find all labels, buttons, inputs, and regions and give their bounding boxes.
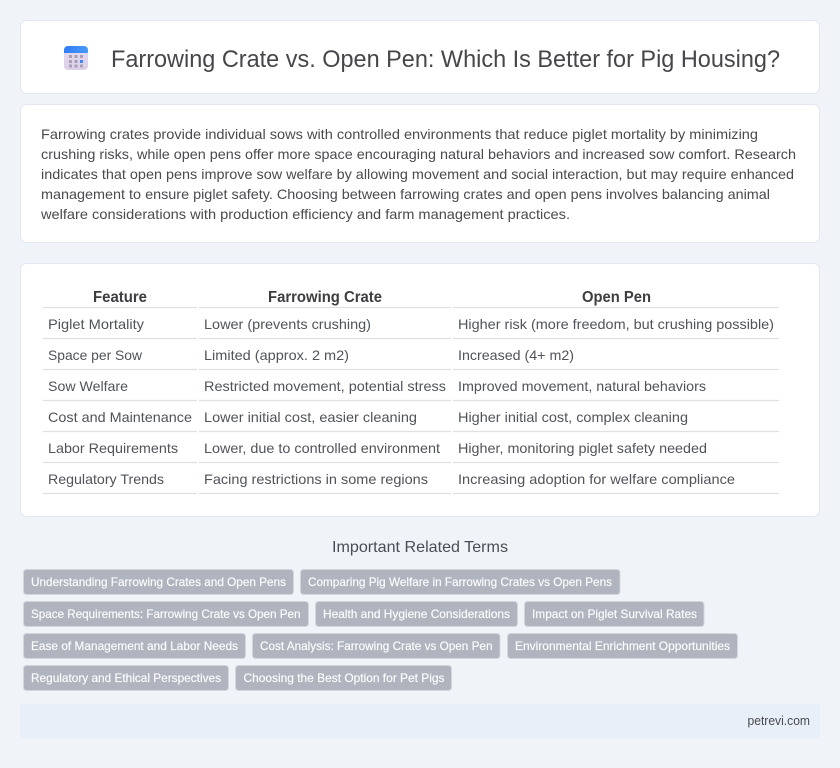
row: sow welfare: Sow Welfare [48,378,128,394]
tag: Ease of Management and Labor Needs [31,639,238,653]
tag: Cost Analysis: Farrowing Crate vs Open Pen [260,639,492,653]
row: labor requirements: Lower, due to controlled environment [204,440,440,456]
row: labor requirements: Higher, monitoring piglet safety needed [458,440,707,456]
heading: important related terms: Important Related Terms [332,539,508,556]
tag [24,634,246,658]
tag [508,634,738,658]
row: space per sow [48,347,574,363]
tag [524,602,704,626]
tag [236,666,452,690]
tag: Impact on Piglet Survival Rates [532,607,697,621]
row: sow welfare: Restricted movement, potential stress [204,378,446,394]
row: cost and maintenance: Cost and Maintenance [48,409,192,425]
intro paragraph: crushing risks, while open pens offer more space encouraging natural behaviors and increased sow comfort. Research [41,146,796,162]
panel: comparison table [20,264,820,516]
row: labor requirements [48,440,707,456]
tag: Comparing Pig Welfare in Farrowing Crates vs Open Pens [308,575,612,589]
row: piglet mortality: Higher risk (more freedom, but crushing possible) [458,316,774,332]
intro paragraph: welfare considerations with production efficiency and farm management practices. [40,206,570,222]
tag [24,602,308,626]
tag: Environmental Enrichment Opportunities [515,639,730,653]
row: piglet mortality: Lower (prevents crushing) [204,316,371,332]
icon: calendar [64,46,88,70]
row: cost and maintenance: Lower initial cost, easier cleaning [204,409,417,425]
tag: Regulatory and Ethical Perspectives [31,671,221,685]
row: sow welfare [48,378,706,394]
row: labor requirements: Labor Requirements [48,440,178,456]
footer source: petrevi.com [748,713,810,728]
row: space per sow: Limited (approx. 2 m2) [204,347,349,363]
title: Farrowing Crate vs. Open Pen: Which Is Better for Pig Housing? [111,46,780,73]
intro paragraph: management to ensure piglet safety. Choosing between farrowing crates and open pens involves balancing animal [41,186,770,202]
row: regulatory trends: Increasing adoption for welfare compliance [458,471,735,487]
intro paragraph: Farrowing crates provide individual sows with controlled environments that reduce piglet mortality by minimizing [41,126,758,142]
row: regulatory trends: Regulatory Trends [48,471,164,487]
table header: Farrowing Crate [268,289,382,306]
row: regulatory trends [48,471,735,487]
intro paragraph: indicates that open pens improve sow welfare by allowing movement and social interaction, but may require enhanced [41,166,794,182]
tag: Choosing the Best Option for Pet Pigs [244,671,444,685]
row: space per sow: Space per Sow [48,347,143,363]
panel: title header [20,20,820,94]
row: sow welfare: Improved movement, natural behaviors [458,378,706,394]
tag: Health and Hygiene Considerations [323,607,510,621]
row: cost and maintenance: Higher initial cost, complex cleaning [458,409,688,425]
tag [252,634,500,658]
tag [24,666,228,690]
tag: Understanding Farrowing Crates and Open Pens [31,575,286,589]
row: piglet mortality: Piglet Mortality [48,316,144,332]
panel: introduction [20,104,820,242]
table header [93,289,651,306]
tag [24,570,294,594]
tag [316,602,518,626]
table header: Open Pen [582,289,651,306]
row: regulatory trends: Facing restrictions in some regions [204,471,428,487]
tag [300,570,620,594]
tag group: related terms [24,570,738,690]
row: space per sow: Increased (4+ m2) [458,347,574,363]
intro paragraph [40,126,796,222]
footer bar [20,704,820,738]
row: piglet mortality [48,316,774,332]
table header: Feature [93,289,147,306]
tag: Space Requirements: Farrowing Crate vs Open Pen [31,607,300,621]
row: cost and maintenance [48,409,688,425]
